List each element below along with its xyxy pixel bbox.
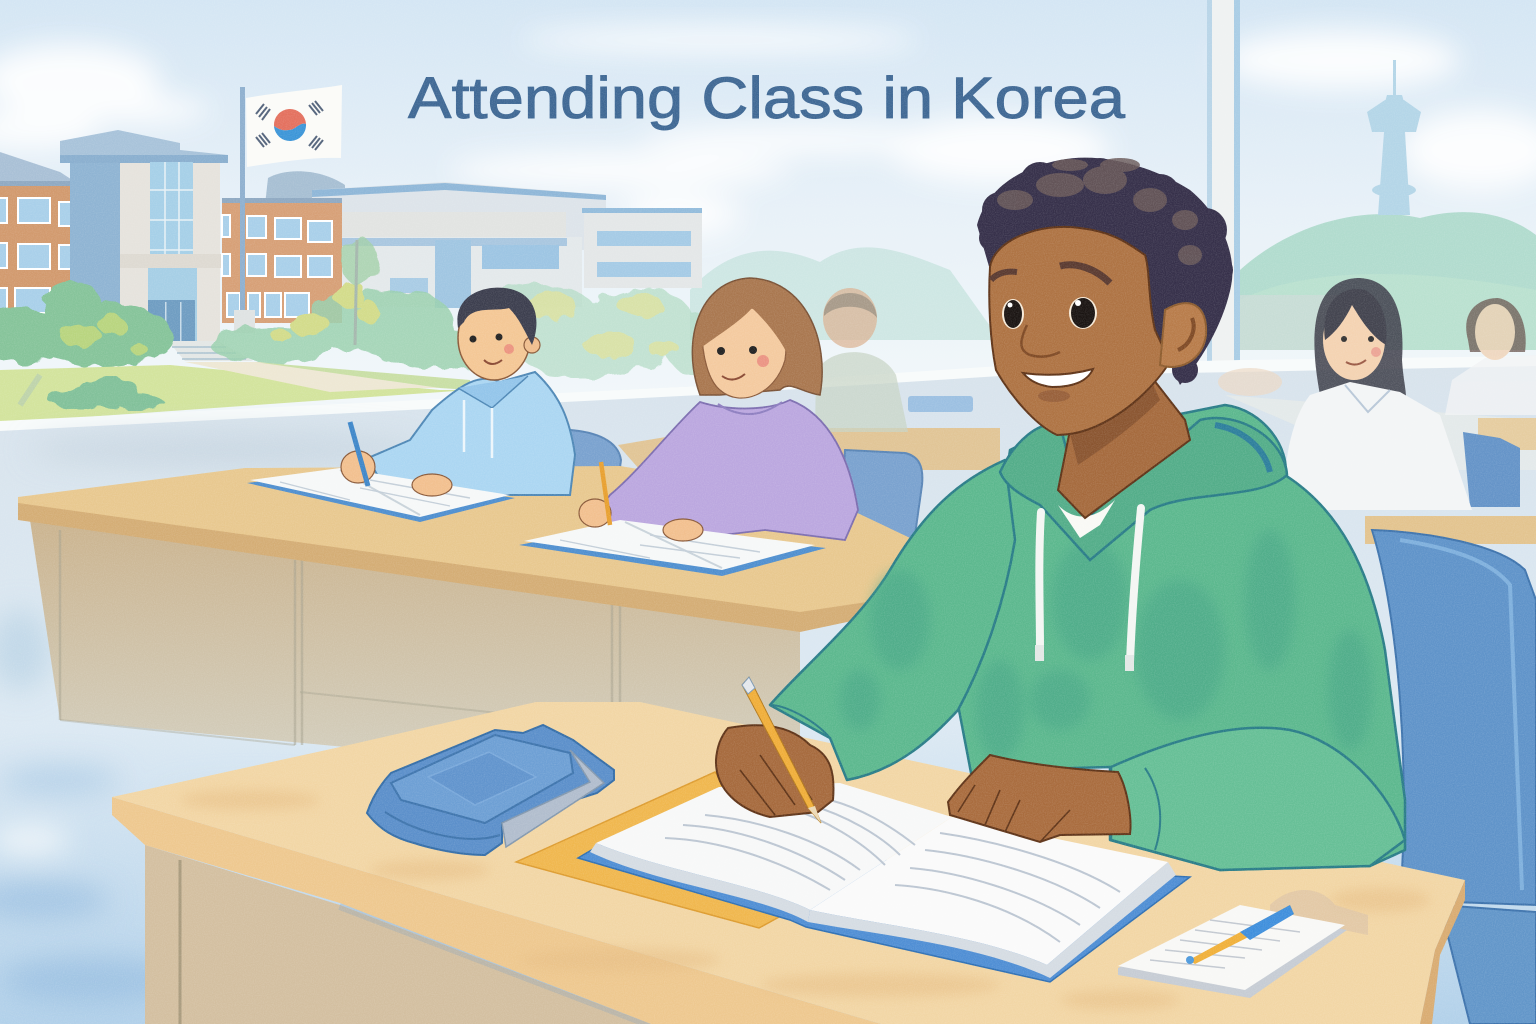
main student's head [977,158,1233,518]
chair [1463,432,1520,507]
main student's chair [1372,530,1536,1024]
cover [578,845,1190,982]
yellow folder [516,772,790,928]
mid desk: long desk with faded panels [18,466,925,790]
icon: Korean flag on pole [234,85,342,333]
neck [1058,375,1190,518]
front panel [145,845,651,1024]
student: girl in purple sweater [595,278,858,540]
title: Attending Class in Korea [408,66,1126,131]
icon: observation tower [1367,60,1421,215]
sleeve cuff fold [1111,728,1405,870]
background student: left rear [815,288,908,432]
window column [1207,0,1240,362]
backpack pouch [367,725,614,855]
ruled lines [665,800,1120,942]
top surface [112,702,1465,1024]
first student's hands and pencil [341,422,452,496]
white tee at neck [1058,500,1115,538]
far desks [618,368,1536,544]
main desk [112,702,1465,1024]
white annex building [265,171,702,308]
background: right hills [690,212,1536,350]
nose [1021,325,1060,357]
trees and shrubs [0,238,735,378]
hair back [977,158,1233,385]
eyebrows [991,272,1017,280]
note pad with pen [1118,890,1368,998]
head [458,296,530,380]
background student: far right [1445,298,1536,415]
student: man in blue hoodie [368,288,575,495]
open notebook [578,783,1190,982]
central tower [60,130,228,341]
smile [1023,369,1093,387]
eyes [1002,299,1024,329]
sweater [595,400,858,540]
floor and window ledge [0,356,1536,1024]
background: sky [0,0,1536,430]
chairs behind mid desk [570,430,922,542]
campus buildings [0,130,702,361]
brick wing right [222,198,342,323]
torso and right arm [950,405,1405,870]
notebook: second student [519,520,826,576]
face [702,307,786,398]
notebook: first student [247,468,515,522]
hood [1000,418,1287,560]
left page [596,783,952,910]
right page [810,817,1168,965]
main student's hoodie [770,405,1405,870]
lawn and path [0,362,470,423]
writing hand with pencil [716,677,834,823]
ear [1160,303,1206,367]
left arm [770,460,1015,780]
stairs [168,341,253,361]
pencil [742,677,821,823]
resting hand [948,755,1130,842]
hoodie [368,372,575,495]
face [989,227,1170,435]
lip [112,797,881,1024]
background student: right rear girl [1284,278,1520,510]
second student's hands and pencil [579,462,703,541]
hair [692,278,822,395]
brick wing left [0,152,105,323]
camouflage shading [840,530,1372,842]
drawstrings [1035,508,1141,671]
